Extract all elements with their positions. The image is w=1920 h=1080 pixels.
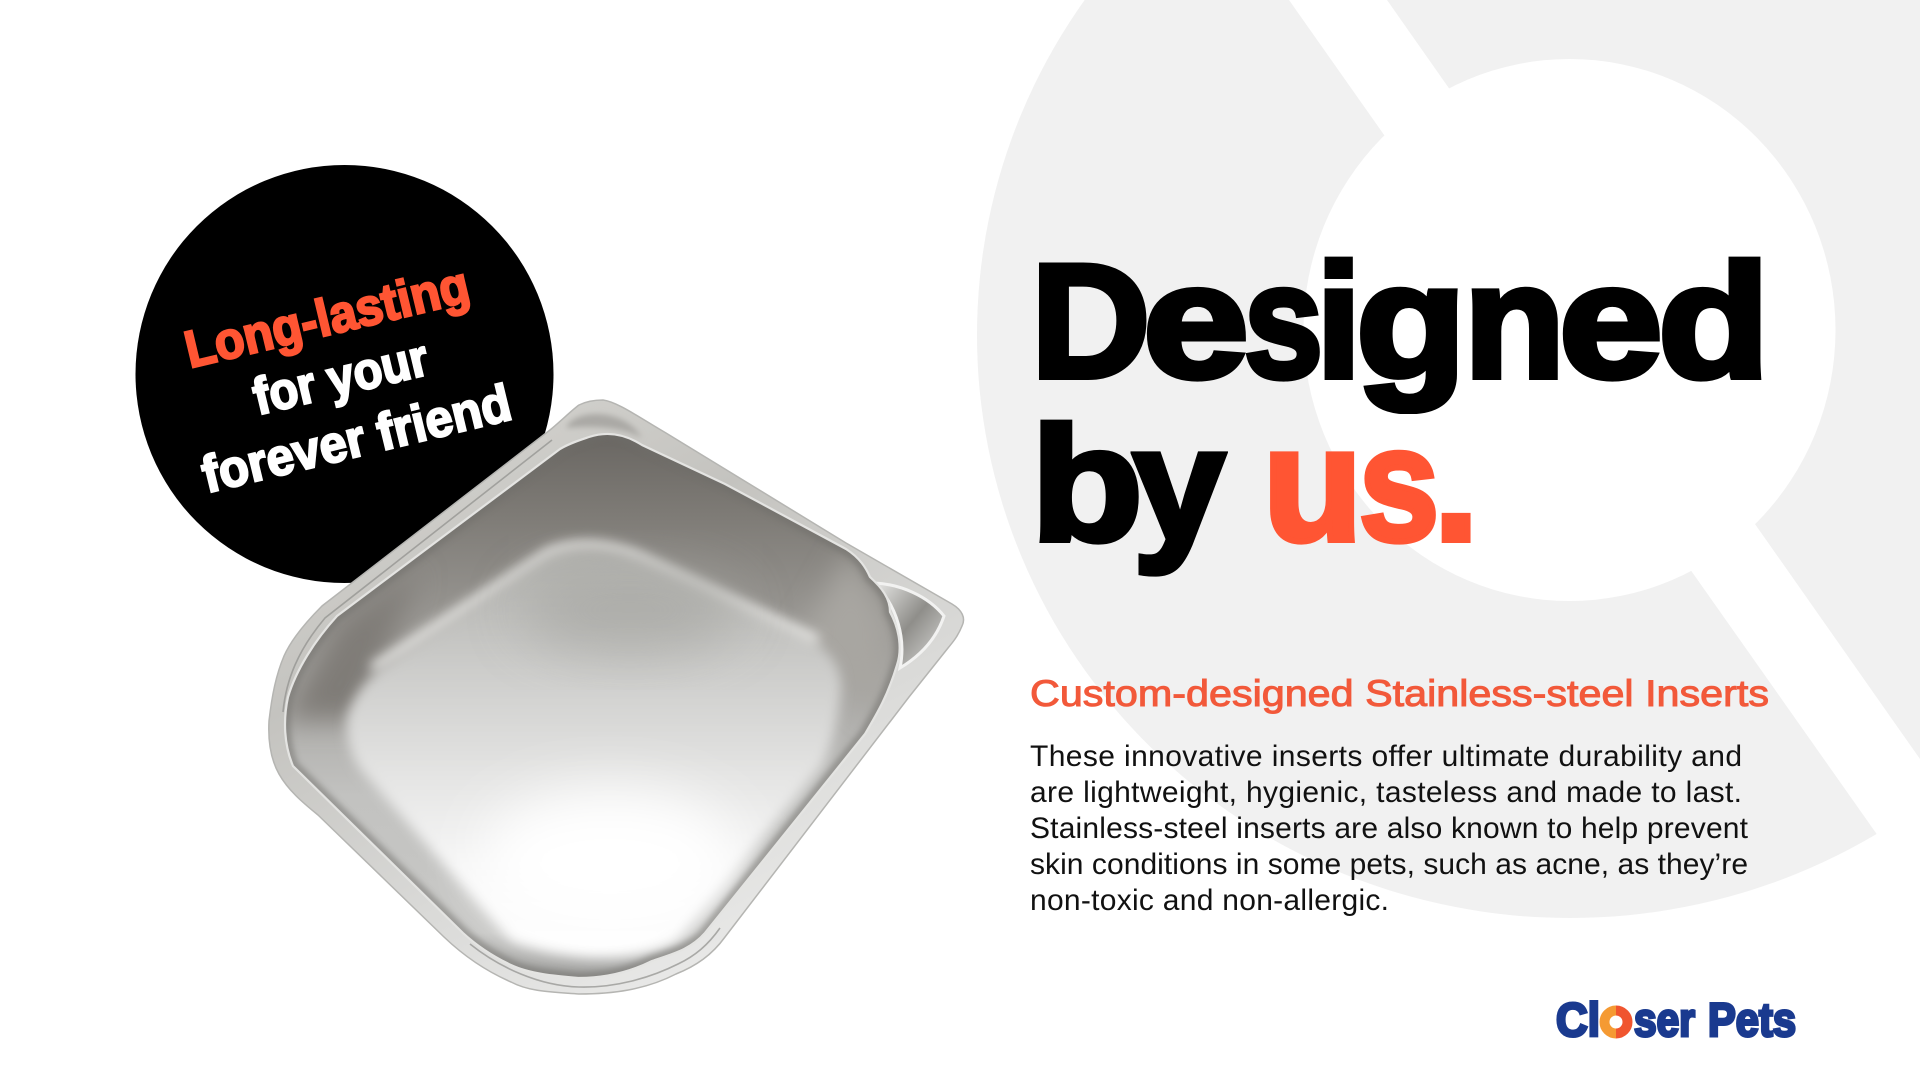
body text: These innovative inserts offer ultimate durability and — [1030, 740, 1742, 773]
rim highlight — [285, 434, 900, 978]
bowl well — [286, 435, 898, 977]
headline line 2: by us.: u — [1262, 394, 1362, 575]
body text: skin conditions in some pets, such as acne, as they’re — [1030, 848, 1748, 881]
headline line 1: Designed: e — [1143, 231, 1249, 412]
logo: Closer Pets: Cl — [1556, 993, 1600, 1046]
headline line 2: by us. — [1031, 394, 1479, 577]
body text: are lightweight, hygienic, tasteless and made to last. — [1030, 776, 1742, 809]
logo ring — [1604, 1010, 1628, 1034]
headline line 1: Designed: s — [1244, 231, 1324, 412]
headline line 2: by us.: s — [1358, 394, 1439, 575]
headline line 1: Designed: g — [1356, 231, 1466, 412]
headline line 2: by us.: y — [1133, 394, 1225, 575]
badge text: forever friend — [196, 374, 517, 505]
stainless-steel bowl insert — [260, 400, 964, 994]
bowl floor — [347, 549, 841, 957]
floor highlight band — [372, 545, 818, 668]
bowl outer rim — [269, 400, 964, 994]
logo: Closer Pets: ser — [1634, 993, 1695, 1046]
headline line 1: Designed: e — [1559, 231, 1663, 412]
top ear — [566, 414, 642, 438]
headline line 1: Designed: D — [1031, 231, 1150, 412]
subheading: Custom-designed Stainless-steel Inserts — [1030, 673, 1769, 714]
floor bright centre — [480, 790, 740, 930]
body text — [1030, 740, 1749, 917]
rim outer line — [283, 440, 720, 987]
body text: Stainless-steel inserts are also known to help prevent — [1030, 812, 1749, 845]
logo: Closer Pets: Pets — [1708, 993, 1796, 1046]
badge: long-lasting — [136, 165, 554, 583]
body text: non-toxic and non-allergic. — [1030, 884, 1389, 917]
background: large Q mark — [977, 0, 1920, 1080]
badge text: Long-lasting — [179, 256, 475, 380]
headline line 1: Designed: i — [1316, 231, 1361, 412]
headline line 2: by us.: . — [1434, 394, 1479, 575]
badge text: for your — [247, 329, 434, 427]
logo: Closer Pets — [1556, 993, 1796, 1046]
badge text — [179, 256, 517, 505]
headline line 1: Designed — [1031, 231, 1770, 414]
floor shaded spot — [520, 570, 740, 650]
headline line 1: Designed: d — [1658, 231, 1770, 412]
logo: Closer Pets: o — [1604, 993, 1628, 1046]
headline line 1: Designed: n — [1464, 231, 1565, 412]
right ear — [874, 583, 944, 668]
well edge shading — [286, 516, 898, 977]
headline line 2: by us.: b — [1031, 394, 1143, 575]
